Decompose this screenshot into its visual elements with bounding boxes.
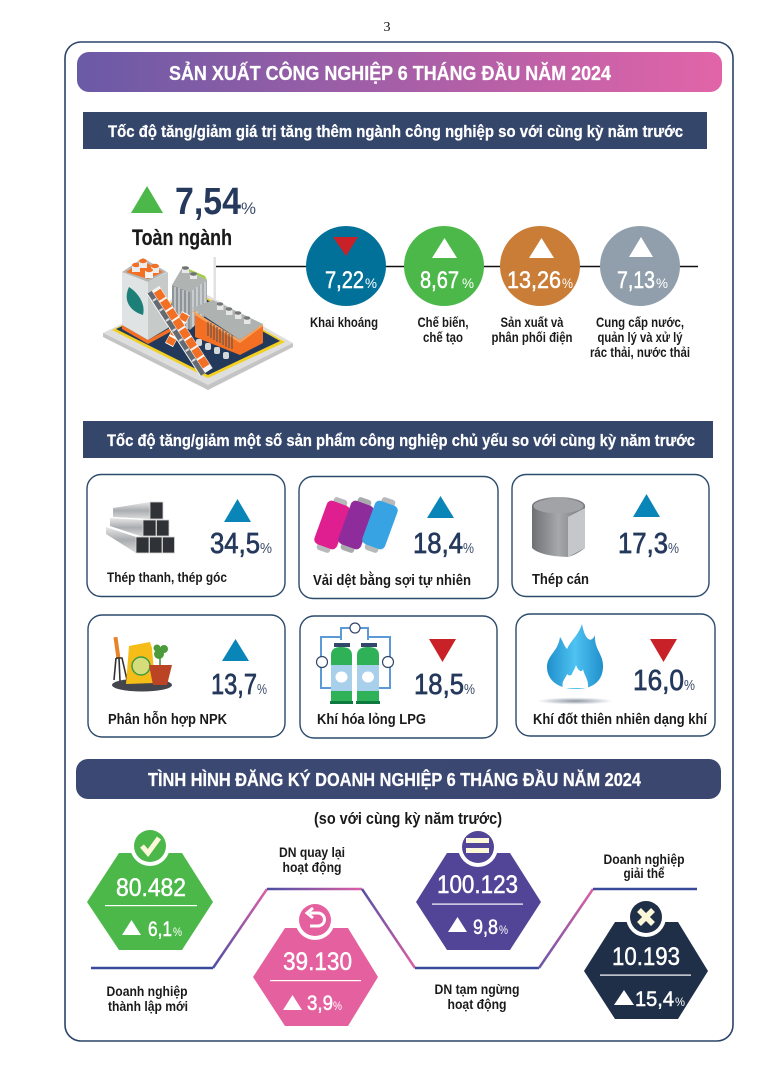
- hexagon: suspended enterprises: [416, 827, 541, 950]
- label: suspended enterprises: [434, 981, 520, 1012]
- circle: mining: [306, 226, 386, 306]
- label: suspended enterprises: DN tạm ngừng: [434, 981, 520, 997]
- icon: steel bars: [106, 502, 174, 553]
- circle: water supply: %: [656, 275, 668, 291]
- circle: mining: %: [365, 275, 377, 291]
- circle: electricity: 13,26: [507, 267, 561, 294]
- label: manufacturing: chế tạo: [423, 329, 463, 345]
- label: new enterprises: [106, 983, 188, 1014]
- hexagon: suspended enterprises: 100.123: [437, 871, 518, 899]
- card: steel bars: Thép thanh, thép góc: [107, 569, 227, 585]
- card: natural gas: [516, 614, 715, 736]
- card: woven fabric: Vải dệt bằng sợi tự nhiên: [313, 571, 471, 589]
- card: LPG: [300, 616, 497, 738]
- hexagon: new enterprises: 6,1: [148, 918, 172, 941]
- card: rolled steel: [512, 474, 709, 596]
- hexagon: resumed enterprises: 3,9: [307, 992, 333, 1015]
- card: NPK fertilizer: 13,7: [211, 669, 257, 701]
- whole industry figure: [131, 181, 256, 250]
- card: LPG: 18,5: [414, 669, 464, 701]
- label: electricity: Sản xuất và: [500, 314, 564, 330]
- label: resumed enterprises: hoạt động: [282, 859, 342, 875]
- card: NPK fertilizer: Phân hỗn hợp NPK: [108, 711, 227, 728]
- label: resumed enterprises: [279, 844, 345, 875]
- card: natural gas: 16,0: [633, 665, 684, 697]
- timeline line: [91, 889, 697, 968]
- icon: equals sign: [466, 838, 489, 853]
- title banner: SẢN XUẤT CÔNG NGHIỆP 6 THÁNG ĐẦU NĂM 2024: [169, 61, 612, 85]
- label: mining: Khai khoáng: [310, 314, 378, 330]
- label: electricity: phân phối điện: [492, 329, 572, 345]
- subtitle: (so với cùng kỳ năm trước): [314, 809, 502, 828]
- card: natural gas: Khí đốt thiên nhiên dạng khí: [533, 711, 708, 728]
- card: rolled steel: Thép cán: [532, 571, 589, 588]
- heading: industry value added growth: [83, 112, 707, 149]
- icon: fertilizer bag and pot: [112, 637, 172, 692]
- hexagon: new enterprises: %: [173, 925, 182, 939]
- icon: steel roll: [532, 497, 585, 557]
- label: dissolved enterprises: Doanh nghiệp: [604, 851, 684, 867]
- card: woven fabric: %: [463, 540, 474, 557]
- card: NPK fertilizer: %: [257, 681, 267, 698]
- heading: business registration: TÌNH HÌNH ĐĂNG KÝ DOANH NGHIỆP 6 THÁNG ĐẦU NĂM 2024: [148, 769, 641, 790]
- label: dissolved enterprises: giải thể: [624, 865, 665, 881]
- title banner: [77, 52, 722, 92]
- card: LPG: Khí hóa lỏng LPG: [317, 711, 426, 728]
- card: rolled steel: %: [668, 540, 679, 557]
- icon: return arrow: [307, 908, 324, 926]
- icon: flame: [537, 624, 613, 704]
- hexagon: dissolved enterprises: 15,4: [635, 988, 674, 1011]
- circle: manufacturing: 8,67: [420, 267, 459, 294]
- circle: water supply: [600, 226, 680, 306]
- card: steel bars: 34,5: [210, 528, 260, 560]
- whole industry figure: 7,54: [175, 181, 241, 223]
- label: water supply: rác thải, nước thải: [590, 344, 690, 360]
- label: resumed enterprises: DN quay lại: [279, 844, 345, 860]
- card: NPK fertilizer: [88, 615, 285, 737]
- label: water supply: Cung cấp nước,: [596, 314, 684, 330]
- hexagon: new enterprises: [87, 826, 213, 950]
- hexagon: dissolved enterprises: %: [675, 995, 685, 1009]
- page number: 3: [384, 20, 390, 35]
- label: dissolved enterprises: [604, 851, 684, 881]
- heading: product growth: [83, 421, 713, 458]
- label: water supply: quản lý và xử lý: [598, 329, 683, 345]
- card: LPG: %: [464, 681, 475, 698]
- label: suspended enterprises: hoạt động: [448, 996, 506, 1012]
- icon: check mark: [142, 838, 159, 853]
- card: rolled steel: 17,3: [618, 528, 668, 560]
- label: manufacturing: [418, 314, 468, 345]
- hexagon: new enterprises: 80.482: [116, 874, 186, 902]
- hexagon: dissolved enterprises: [584, 897, 708, 1019]
- heading: business registration: [76, 759, 721, 799]
- hexagon: resumed enterprises: [253, 900, 378, 1026]
- hexagon: dissolved enterprises: 10.193: [612, 943, 680, 971]
- circle: manufacturing: %: [462, 275, 474, 291]
- hexagon: resumed enterprises: %: [333, 999, 342, 1013]
- whole industry figure: Toàn ngành: [132, 225, 232, 250]
- icon: factory: [103, 257, 293, 390]
- icon: thread spools: [311, 495, 401, 555]
- label: new enterprises: Doanh nghiệp: [106, 983, 188, 999]
- circle: mining: 7,22: [325, 267, 364, 294]
- label: water supply: [590, 314, 690, 360]
- circle: electricity: [500, 226, 580, 306]
- circle: electricity: %: [562, 275, 573, 291]
- hexagon: suspended enterprises: 9,8: [473, 916, 498, 939]
- whole industry figure: %: [241, 199, 256, 218]
- label: manufacturing: Chế biến,: [418, 314, 468, 330]
- card: woven fabric: 18,4: [413, 528, 463, 560]
- circle: water supply: 7,13: [617, 267, 655, 294]
- hexagon: suspended enterprises: %: [499, 923, 508, 937]
- circle: manufacturing: [404, 226, 484, 306]
- card: natural gas: %: [684, 677, 695, 694]
- card: woven fabric: [299, 476, 498, 598]
- card: steel bars: %: [260, 540, 272, 557]
- heading: industry value added growth: Tốc độ tăng/giảm giá trị tăng thêm ngành công nghiệp so với cùng kỳ năm trước: [108, 122, 683, 141]
- card: steel bars: [87, 474, 285, 596]
- label: new enterprises: thành lập mới: [108, 998, 188, 1014]
- icon: cross: [639, 910, 653, 924]
- connector line: [214, 266, 698, 268]
- label: electricity: [492, 314, 572, 345]
- hexagon: resumed enterprises: 39.130: [283, 948, 352, 976]
- icon: gas cylinders: [316, 623, 394, 704]
